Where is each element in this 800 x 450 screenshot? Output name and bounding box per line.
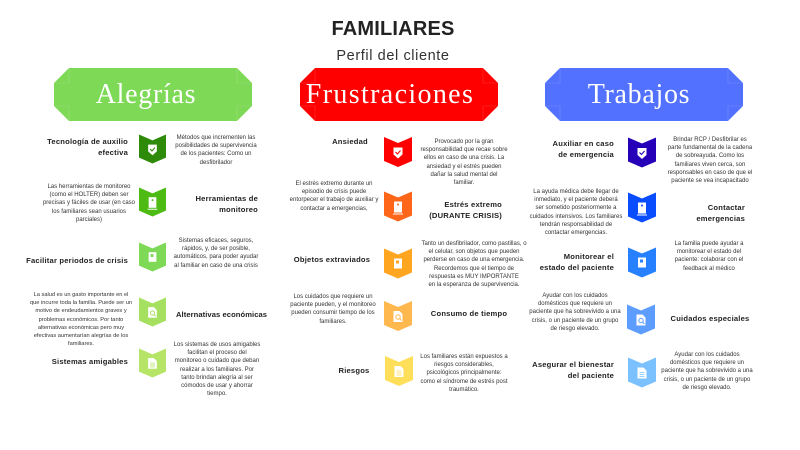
item text <box>290 294 376 325</box>
item text: desfibrilador <box>200 160 232 166</box>
item text: La ayuda médica debe llegar de <box>533 189 619 195</box>
item title: Tecnología de auxilio efectiva <box>47 137 128 157</box>
item text: cuidados intensivos. Los familiares <box>530 214 622 220</box>
item text <box>174 342 260 397</box>
item text <box>530 188 622 236</box>
item text <box>43 184 135 223</box>
item text: Los cuidados que requiere un <box>293 294 373 300</box>
icon: document <box>384 248 412 278</box>
item text: responsables en caso de que el <box>668 170 752 176</box>
item text: paciente que ha sobrevivido a una <box>661 368 753 374</box>
item text: familiares. <box>319 319 347 325</box>
item text <box>420 354 508 393</box>
item text: de sobreayuda. Como los <box>676 153 744 159</box>
column 1: Alegrías <box>26 134 267 397</box>
item text: contactar emergencias. <box>545 230 607 236</box>
item title: Herramientas de monitoreo: Herramientas de <box>195 194 258 203</box>
item text <box>529 292 621 332</box>
item text: familiar. <box>454 180 474 186</box>
item text: Recordemos que el tiempo de <box>434 266 514 272</box>
header label: Alegrías: Alegrías <box>96 79 196 110</box>
item text: Tanto un desfibrilador, como pastillas, o <box>421 241 527 247</box>
header label: Trabajos: Trabajos <box>588 79 690 110</box>
item text: paciente que ha sobrevivido a una <box>529 309 621 315</box>
item text: alternativas económicas pero muy <box>38 325 124 331</box>
item text: rápidos, y, de ser posible, <box>182 246 250 252</box>
item title: Contactar emergencias <box>696 203 745 223</box>
icon: document <box>139 242 166 272</box>
item text <box>642 351 772 392</box>
item text: parciales) <box>76 217 102 223</box>
item title: Asegurar el bienestar del paciente: Asegurar el bienestar <box>532 360 614 369</box>
item text: ser sometido posteriormente a <box>535 205 617 211</box>
item text: respuesta es MUY IMPORTANTE <box>429 274 519 280</box>
item title: Auxiliar en caso de emergencia: de emergencia <box>558 150 614 159</box>
item text: que incurre toda la familia. Puede ser un <box>30 300 132 306</box>
item text: responsabilidad que recae sobre <box>420 147 508 153</box>
item text: como el síndrome de estrés post <box>420 379 508 385</box>
icon: note <box>628 357 656 388</box>
item text: familiares viven cerca, son <box>675 162 745 168</box>
item text: perderse en caso de una emergencia. <box>423 257 525 263</box>
item text: Ayudar con los cuidados <box>674 352 740 358</box>
item text: tiempo. <box>207 391 227 397</box>
item title: Alternativas económicas: Alternativas económicas <box>176 310 267 319</box>
item text: al familiar en caso de una crisis <box>174 263 258 269</box>
item text: contactar a emergencias, <box>300 206 368 212</box>
item text: entorpecer el trabajo de auxiliar y <box>290 197 378 203</box>
icon: document <box>628 248 656 278</box>
item text <box>30 292 132 347</box>
item text: paciente pueden, y el monitoreo <box>290 302 376 308</box>
icon: search document <box>384 301 412 331</box>
item text: feedback al médico <box>683 266 735 272</box>
item title: Monitorear el estado del paciente: Monitorear el <box>564 252 614 261</box>
item text <box>290 180 378 212</box>
item text: La salud es un gasto importante en el <box>34 292 128 298</box>
item title: Herramientas de monitoreo: monitoreo <box>219 205 258 214</box>
item text: domésticos que requiere un <box>538 301 612 307</box>
item text: problemas económicos. Por tanto <box>39 317 123 323</box>
item title: Sistemas amigables: Sistemas amigables <box>52 357 128 366</box>
item title: Herramientas de monitoreo <box>195 194 258 214</box>
item text: automáticos, para poder ayudar <box>174 254 258 260</box>
item text <box>175 134 257 166</box>
icon: note <box>139 348 166 378</box>
item text: dañar la salud mental del <box>430 172 498 178</box>
item title: Riesgos: Riesgos <box>339 366 369 375</box>
item text: domésticos que requiere un <box>670 360 744 366</box>
item text: riesgos considerables, <box>434 362 494 368</box>
item text: de riesgo elevado. <box>682 385 732 391</box>
item text: (como el HOLTER) deben ser <box>50 192 128 198</box>
item title: Consumo de tiempo: Consumo de tiempo <box>431 309 507 318</box>
item text: parte fundamental de la cadena <box>668 145 752 151</box>
item text: ansiedad y el estrés pueden <box>426 164 502 170</box>
icon: search document <box>139 298 166 326</box>
item text: Ayudar con los cuidados <box>542 293 608 299</box>
item text: facilitan el proceso del <box>187 350 247 356</box>
item text: pueden consumir tiempo de los <box>291 310 375 316</box>
item title: Estrés extremo (DURANTE CRISIS): (DURANTE CRISIS) <box>429 211 502 220</box>
item title: Cuidados especiales: Cuidados especiales <box>671 314 749 323</box>
item title: Asegurar el bienestar del paciente <box>504 359 614 381</box>
item title: Tecnología de auxilio efectiva: Tecnología de auxilio <box>47 137 128 146</box>
item title: Contactar emergencias: Contactar <box>708 203 745 212</box>
item text: crisis, o un paciente de un grupo <box>664 377 750 383</box>
header badge: Trabajos <box>545 68 743 121</box>
item text: efectivas aumentarían alegrías de los <box>34 333 128 339</box>
icon: shield <box>139 134 166 164</box>
header badge: Frustraciones <box>300 68 498 121</box>
item title: Tecnología de auxilio efectiva: efectiva <box>98 148 128 157</box>
item text: familiares. <box>68 341 94 347</box>
item text: episodio de crisis puede <box>302 189 366 195</box>
item text: los familiares sean usuarios <box>52 209 126 215</box>
item title: Contactar emergencias: emergencias <box>696 214 745 223</box>
column 2: Frustraciones <box>290 137 527 393</box>
header label: Frustraciones: Frustraciones <box>306 79 474 110</box>
item text: paciente se vea incapacitado <box>671 178 749 184</box>
item text: realizar a los familiares. Por <box>180 367 254 373</box>
icon: shield <box>628 138 656 168</box>
item text: monitorear el estado del <box>677 249 741 255</box>
item text: precisas y fáciles de usar (en caso <box>43 200 135 206</box>
item text: La familia puede ayudar a <box>674 241 744 247</box>
title: FAMILIARES <box>331 18 455 40</box>
item text: de los pacientes: Como un <box>180 151 252 157</box>
item text <box>421 240 527 288</box>
column 3: Trabajos <box>529 136 753 391</box>
subtitle: Perfil del cliente <box>336 48 450 64</box>
icon: device <box>139 188 166 216</box>
item title: Facilitar periodos de crisis: Facilitar periodos de crisis <box>26 256 128 265</box>
item text: Provocado por la gran <box>434 139 494 145</box>
icon: device <box>628 192 656 222</box>
item text: tendrán responsabilidad de <box>540 222 612 228</box>
item text: tanto brindan alegría al ser <box>181 375 253 381</box>
item text: psicológicos principalmente: <box>426 370 502 376</box>
item text: ellos en caso de una crisis. La <box>424 155 504 161</box>
item text <box>420 138 508 186</box>
item text: crisis, o un paciente de un grupo <box>532 318 618 324</box>
item title: Auxiliar en caso de emergencia <box>552 139 614 159</box>
icon: device <box>384 192 412 222</box>
item text <box>174 238 258 269</box>
item text: posibilidades de supervivencia <box>175 143 257 149</box>
item text: monitoreo o cuidado que deban <box>175 358 259 364</box>
item text: traumático. <box>449 387 479 393</box>
item text: cómodos de usar y ahorrar <box>181 383 253 389</box>
icon: shield <box>384 137 412 167</box>
item text: Los familiares están expuestos a <box>420 354 508 360</box>
item title: Auxiliar en caso de emergencia: Auxiliar en caso <box>553 139 614 148</box>
item text: el celular, son objetos que pueden <box>428 249 520 255</box>
icon: search document <box>627 304 655 334</box>
item title: Estrés extremo (DURANTE CRISIS) <box>429 200 502 220</box>
icon: note <box>385 356 413 386</box>
item title: Estrés extremo (DURANTE CRISIS): Estrés extremo <box>444 200 502 209</box>
item title: Ansiedad: Ansiedad <box>332 137 368 146</box>
item text: El estrés extremo durante un <box>295 181 373 187</box>
item text: Métodos que incrementen las <box>177 135 255 141</box>
item text: Las herramientas de monitoreo <box>47 184 131 190</box>
item title: Monitorear el estado del paciente <box>540 252 614 272</box>
item text: de riesgo elevado. <box>550 326 600 332</box>
item text: Los sistemas de usos amigables <box>174 342 260 348</box>
item title: Monitorear el estado del paciente: estado del paciente <box>540 263 614 272</box>
item text <box>674 240 744 272</box>
header badge: Alegrías <box>54 68 252 121</box>
item text: Sistemas eficaces, seguros, <box>179 238 253 244</box>
item title: Asegurar el bienestar del paciente: del paciente <box>568 371 614 380</box>
item text: en la esperanza de supervivencia. <box>428 282 520 288</box>
item text: Brindar RCP / Desfibrilar es <box>673 137 747 143</box>
item title: Objetos extraviados: Objetos extraviados <box>294 255 370 264</box>
item text: inmediato, y el paciente deberá <box>534 197 618 203</box>
item text: paciente: colaborar con el <box>675 257 743 263</box>
item text: motivo de endeudamientos graves y <box>35 308 127 314</box>
item text <box>668 136 752 184</box>
